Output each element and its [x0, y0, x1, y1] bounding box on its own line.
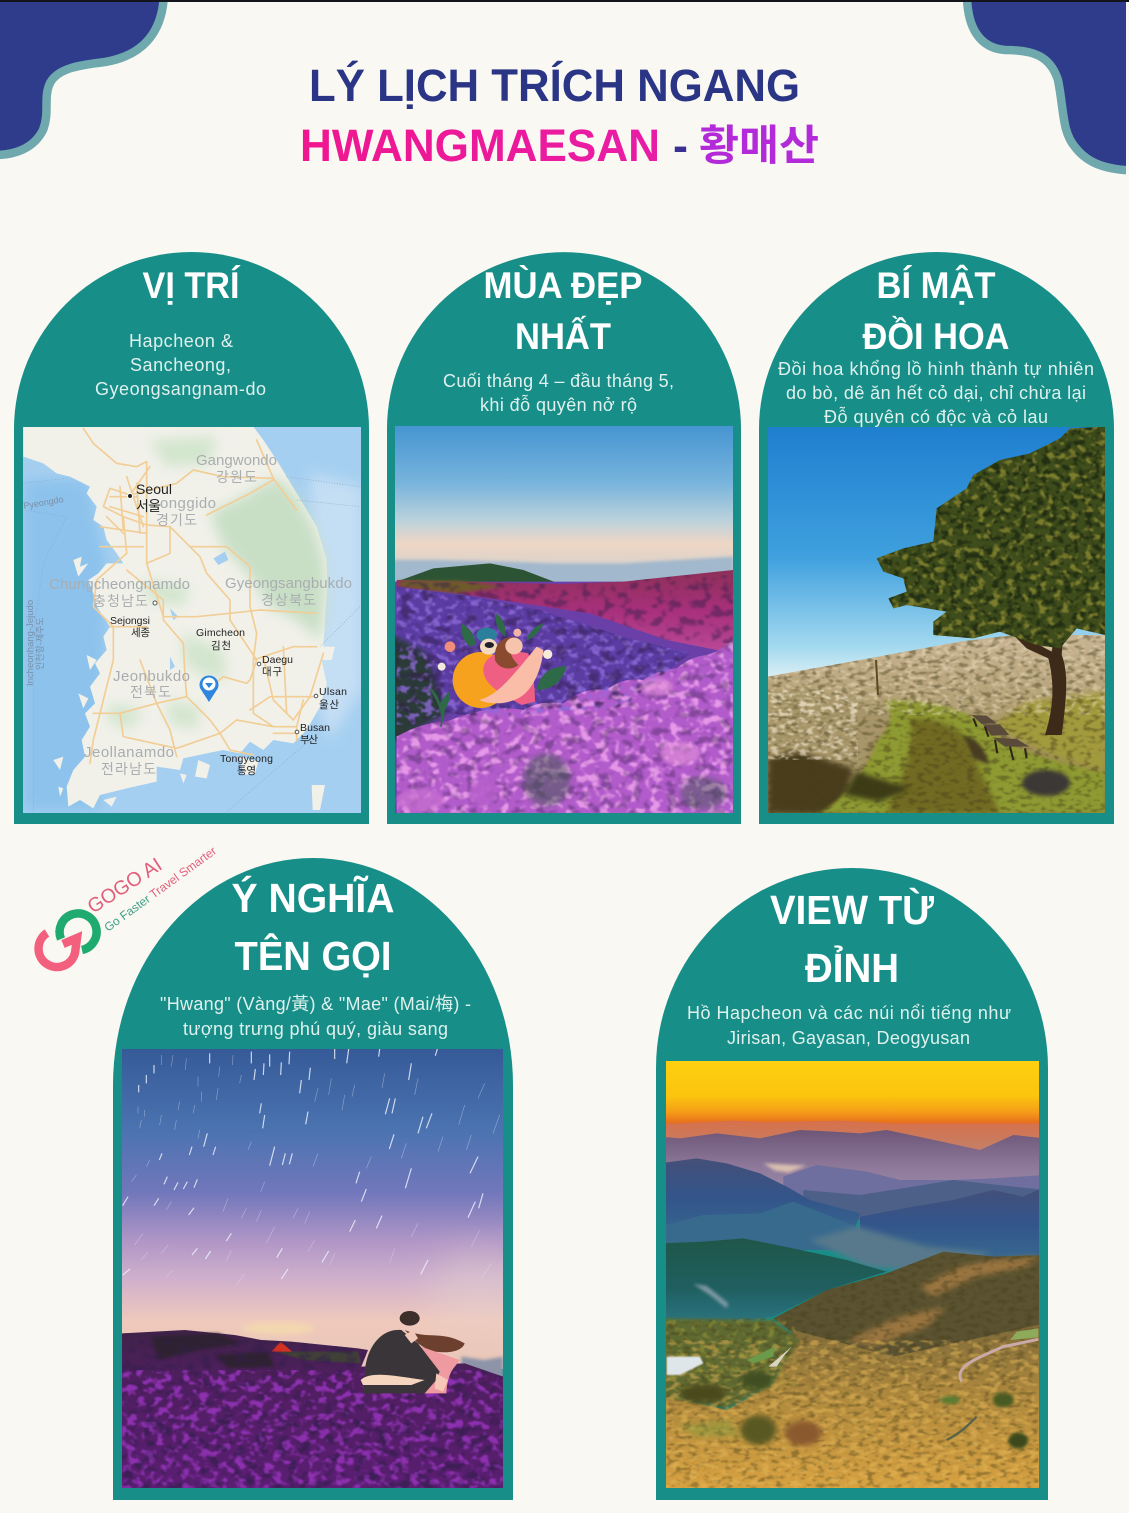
text: flower hill description: Đồi hoa khổng lồ hình thành tự nhiên: [778, 359, 1094, 379]
heading: location: VỊ TRÍ: [142, 265, 241, 306]
photo: azalea field: [390, 426, 740, 815]
text: best season description: [443, 371, 674, 415]
map region labels: Gangwondo: [196, 452, 277, 469]
map region labels: Busan: [300, 722, 330, 734]
panel: summit view: [656, 868, 1048, 1500]
map region labels: 대구: [262, 666, 282, 678]
map region labels: Ulsan: [319, 686, 347, 698]
heading: flower hill secret: ĐỒI HOA: [862, 315, 1010, 357]
map region labels: Tongyeong: [220, 753, 273, 765]
map region labels: 울산: [319, 699, 339, 711]
illustration: tree: [875, 427, 1105, 735]
logo: GOGO AI: Go Faster Travel Smarter: [102, 844, 219, 934]
title: -: [673, 120, 688, 171]
heading: name meaning: TÊN GỌI: [234, 933, 392, 979]
map region labels: 통영: [237, 765, 256, 777]
logo: GOGO AI: GOGO AI: [84, 854, 166, 918]
decoration: top-left corner blob: [0, 0, 164, 155]
map region labels: 인천항-제주도: [35, 617, 45, 670]
star trails: [123, 1049, 500, 1285]
illustration: embracing couple: [361, 1311, 465, 1393]
map region labels: Jeonbukdo: [113, 668, 190, 685]
title: HWANGMAESAN: [300, 120, 660, 171]
heading: best season: [484, 264, 642, 357]
text: summit view description: Jirisan, Gayasan, Deogyusan: [727, 1028, 970, 1048]
illustration: benches: [972, 715, 1029, 760]
map region labels: 서울: [136, 498, 161, 514]
heading: name meaning: Ý NGHĨA: [232, 875, 394, 921]
heading: summit view: VIEW TỪ: [770, 887, 935, 933]
title: LÝ LỊCH TRÍCH NGANG: [309, 60, 800, 111]
text: name meaning description: [160, 994, 471, 1039]
panel: name meaning: [113, 858, 530, 1500]
photo: tree on silver grass hill: [768, 427, 1105, 813]
map region labels: 전북도: [130, 684, 171, 700]
text: summit view description: [687, 1003, 1011, 1048]
heading: summit view: [770, 887, 935, 991]
map region labels: onggido: [160, 495, 216, 512]
map region labels: 충청남도: [93, 593, 148, 609]
text: best season description: Cuối tháng 4 – đầu tháng 5,: [443, 371, 674, 391]
map region labels: Sejongsi: [110, 615, 150, 627]
text: location description: Hapcheon &: [129, 331, 233, 351]
text: flower hill description: do bò, dê ăn hết cỏ dại, chỉ chừa lại: [786, 383, 1086, 403]
text: name meaning description: tượng trưng phú quý, giàu sang: [183, 1019, 448, 1039]
map of South Korea: [23, 427, 363, 813]
text: flower hill description: Đỗ quyên có độc và cỏ lau: [824, 406, 1048, 427]
icon: map pin: [200, 675, 218, 702]
map region labels: Chungcheongnamdo: [49, 576, 190, 593]
panel: location: [14, 252, 369, 824]
logo: GOGO AI: [39, 844, 219, 967]
text: location description: [95, 331, 266, 399]
map region labels: Daegu: [262, 654, 293, 666]
text: name meaning description: "Hwang" (Vàng/黃) & "Mae" (Mai/梅) -: [160, 994, 471, 1014]
text: flower hill description: [778, 359, 1094, 427]
text: best season description: khi đỗ quyên nở rộ: [480, 394, 637, 415]
text: summit view description: Hồ Hapcheon và các núi nổi tiếng như: [687, 1003, 1011, 1023]
map region labels: 전라남도: [101, 761, 156, 777]
heading: name meaning: [232, 875, 394, 979]
text: location description: Gyeongsangnam-do: [95, 379, 266, 399]
map region labels: Incheonhang-Jejudo: [25, 600, 36, 686]
panel: flower hill secret: [759, 252, 1114, 824]
photo: mountain ranges at sunset: [660, 1061, 1045, 1488]
rock: [1022, 770, 1070, 796]
heading: summit view: ĐỈNH: [805, 945, 899, 991]
decoration: top-right corner blob: [967, 0, 1129, 171]
map region labels: 강원도: [216, 469, 257, 485]
heading: best season: NHẤT: [515, 316, 611, 357]
text: location description: Sancheong,: [130, 355, 231, 375]
map region labels: 경기도: [156, 512, 197, 528]
heading: best season: MÙA ĐẸP: [484, 264, 642, 306]
map region labels: Pyeongdo: [23, 494, 64, 511]
map region labels: Seoul: [136, 481, 172, 497]
map region labels: 세종: [131, 627, 150, 639]
map region labels: Gyeongsangbukdo: [225, 575, 352, 592]
heading: flower hill secret: [862, 264, 1010, 357]
map region labels: Gimcheon: [196, 627, 245, 639]
map region labels: Jeollanamdo: [84, 744, 174, 761]
map region labels: 부산: [300, 734, 318, 746]
illustration: girl with orange circle: [429, 613, 567, 727]
title: [300, 60, 819, 171]
map region labels: 김천: [211, 640, 231, 652]
title: 황매산: [699, 122, 819, 169]
panel: best season: [387, 252, 741, 824]
map region labels: 경상북도: [261, 592, 316, 608]
icon: linked G rings: [39, 913, 97, 967]
map region labels: [23, 452, 352, 777]
photo: star trails over azaleas: [122, 1049, 530, 1488]
heading: flower hill secret: BÍ MẬT: [876, 264, 996, 306]
